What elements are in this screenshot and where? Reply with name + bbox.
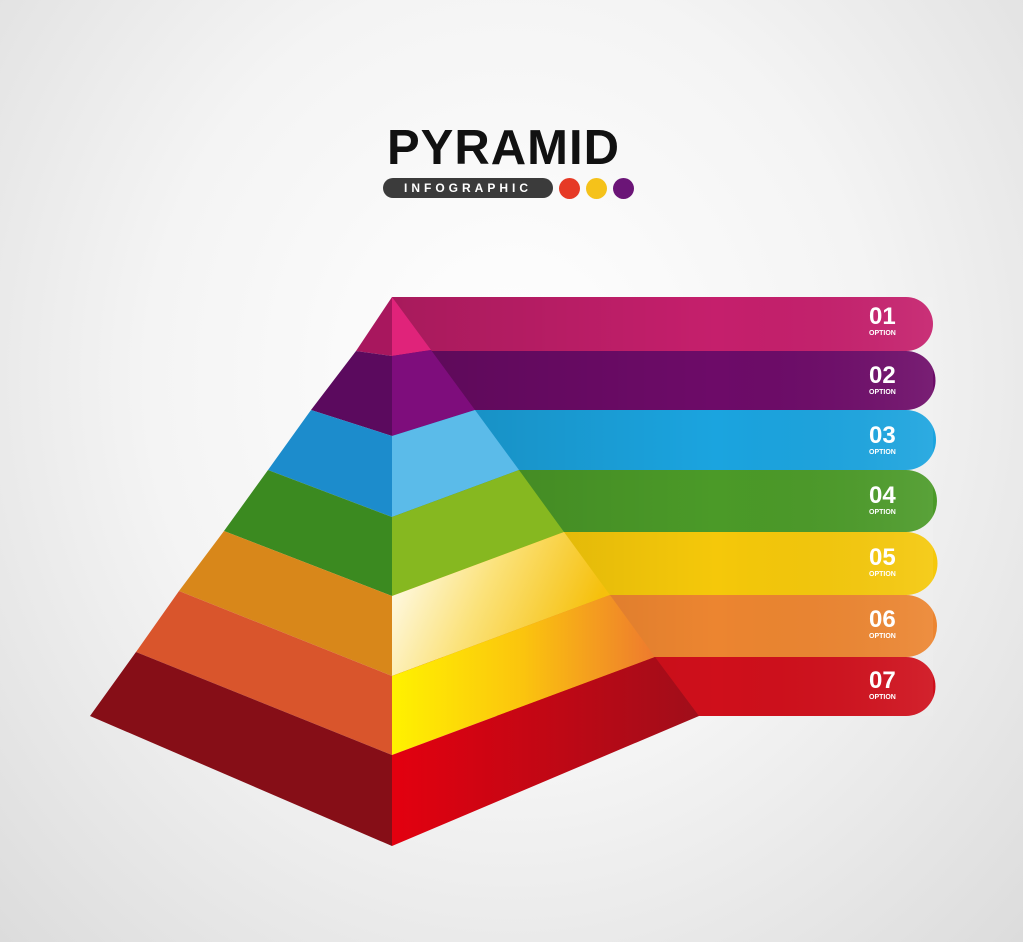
title: [383, 121, 634, 199]
heading: PYRAMID: PYRAMID: [387, 121, 620, 175]
subtitle pill: [383, 178, 553, 198]
label 03: 03: [869, 422, 896, 449]
labels: [869, 303, 896, 701]
label 01: OPTION: [869, 330, 896, 337]
label 03: OPTION: [869, 449, 896, 456]
label 02: OPTION: [869, 389, 896, 396]
label 05: 05: [869, 544, 896, 571]
pyramid right face: [392, 297, 699, 846]
ribbons: [392, 297, 938, 716]
label 02: 02: [869, 362, 896, 389]
label 06: 06: [869, 606, 896, 633]
label 07: 07: [869, 667, 896, 694]
dots: [559, 178, 634, 199]
label 07: OPTION: [869, 694, 896, 701]
label 01: 01: [869, 303, 896, 330]
label 05: OPTION: [869, 571, 896, 578]
label 06: OPTION: [869, 633, 896, 640]
subtitle pill: INFOGRAPHIC: [404, 181, 532, 195]
pyramid left face: [90, 297, 392, 846]
label 04: OPTION: [869, 509, 896, 516]
label 04: 04: [869, 482, 896, 509]
